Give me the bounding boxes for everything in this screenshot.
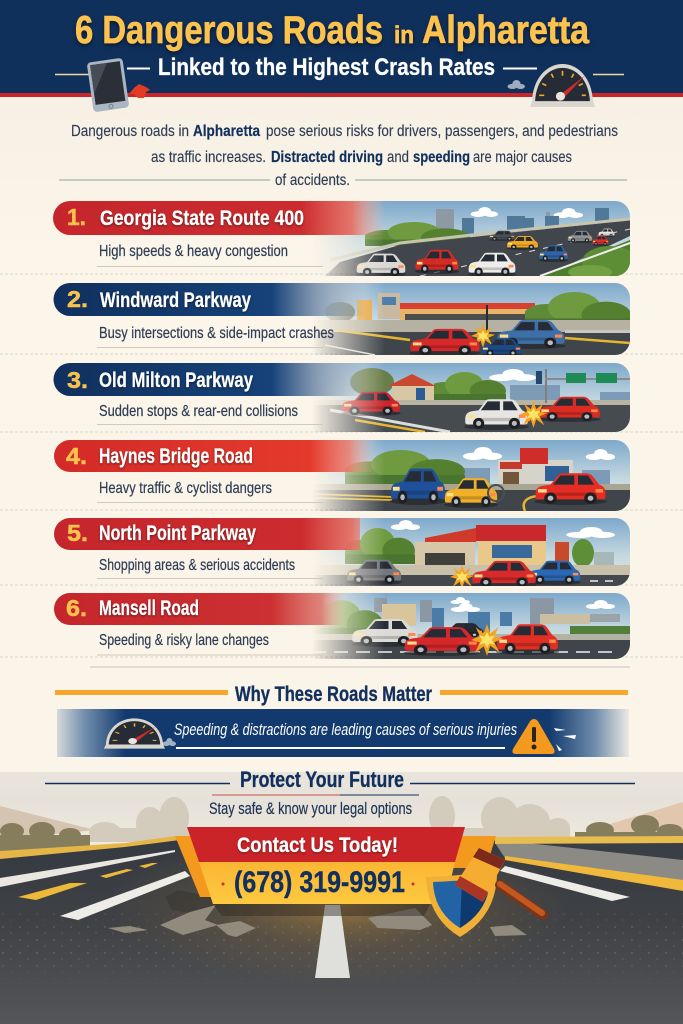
number: 5. (67, 520, 88, 546)
road name: North Point Parkway (99, 522, 256, 545)
hazard description: Heavy traffic & cyclist dangers (99, 480, 272, 497)
number: 6. (66, 595, 87, 621)
asphalt (0, 838, 683, 1024)
icon: flying debris (554, 728, 576, 751)
icon: warning triangle (512, 719, 555, 754)
road name: Haynes Bridge Road (99, 445, 253, 468)
title pill (54, 518, 360, 550)
white lane lines (0, 850, 175, 887)
intro paragraph: are major causes (473, 149, 572, 166)
road row 2: Windward Parkway (54, 283, 631, 357)
intro paragraph: as traffic increases. (151, 149, 266, 166)
icon: red crash debris (129, 84, 150, 98)
scene: risky lane change crash (280, 593, 630, 659)
scene: cyclist hazard in traffic (280, 440, 630, 511)
road row 6: Mansell Road (54, 593, 630, 659)
heading: why these roads matter (55, 683, 628, 706)
scene: rear-end collision at signal (280, 363, 630, 432)
intro paragraph: Alpharetta (193, 123, 260, 140)
number: 2. (67, 286, 88, 312)
title pill (54, 593, 345, 625)
banner: speeding and distractions (57, 709, 629, 757)
road name: Mansell Road (99, 597, 199, 620)
call to action banner (175, 827, 496, 916)
road name: Windward Parkway (100, 289, 251, 312)
bicycle wheel (488, 485, 504, 501)
hazard description: High speeds & heavy congestion (99, 243, 288, 260)
banner ground shadow (213, 904, 430, 916)
title pill (54, 363, 365, 396)
header band (0, 0, 683, 112)
heading: why these roads matter: Why These Roads Matter (235, 683, 432, 706)
title pill (54, 283, 365, 316)
yellow lane dashes (18, 863, 158, 900)
title: 6 Dangerous Roads (75, 9, 383, 52)
intro paragraph (59, 123, 627, 189)
icon: shield (426, 870, 497, 937)
hazy tree line (89, 796, 570, 842)
intro paragraph: speeding (413, 149, 470, 166)
intro paragraph: Distracted driving (271, 149, 383, 166)
yellow edge lines (0, 836, 180, 859)
road row 5: North Point Parkway (54, 518, 630, 589)
subtitle: Linked to the Highest Crash Rates (158, 54, 495, 81)
intro paragraph: of accidents. (275, 172, 350, 189)
contact heading: Contact Us Today! (237, 834, 398, 857)
road name: Georgia State Route 400 (100, 207, 304, 230)
scene: shopping center crash (315, 518, 630, 586)
hazard description: Shopping areas & serious accidents (99, 557, 295, 574)
title pill (53, 201, 385, 235)
road row 3: Old Milton Parkway (54, 363, 630, 432)
title pill (54, 440, 375, 472)
road background scene (0, 772, 683, 1024)
road row 4: Haynes Bridge Road (54, 440, 630, 511)
pavement crater shadow (165, 890, 213, 913)
icon: speedometer (530, 64, 595, 107)
tagline: Stay safe & know your legal options (209, 799, 412, 818)
near trees (0, 815, 683, 853)
hazard description: Speeding & risky lane changes (99, 632, 269, 649)
heading: protect your future: Protect Your Future (240, 767, 404, 792)
intro paragraph: pose serious risks for drivers, passengers, and pedestrians (266, 123, 618, 140)
scene: highway traffic (320, 201, 630, 276)
intro paragraph: Dangerous roads in (71, 123, 189, 140)
intro paragraph: and (387, 149, 409, 166)
title: in (394, 22, 414, 49)
hazard description: Busy intersections & side-impact crashes (99, 325, 334, 342)
icon: smartphone (87, 58, 129, 112)
title: Alpharetta (422, 9, 589, 52)
icon: exhaust puff (162, 738, 176, 746)
number: 4. (66, 443, 87, 469)
icon: exhaust puff (507, 80, 525, 89)
broken pavement (108, 905, 527, 937)
road row 1: Georgia State Route 400 (53, 201, 638, 279)
banner text: Speeding & distractions are leading causes of serious injuries (174, 720, 517, 739)
phone number: (678) 319-9991 (234, 866, 405, 899)
number: 1. (67, 204, 86, 230)
number: 3. (67, 367, 88, 393)
icon: speedometer (104, 718, 165, 749)
icon: gavel (455, 848, 543, 915)
scene: shopping strip side-impact crash (315, 283, 630, 355)
pavement grain (2, 906, 683, 980)
road name: Old Milton Parkway (99, 369, 253, 392)
hazard description: Sudden stops & rear-end collisions (99, 403, 298, 420)
